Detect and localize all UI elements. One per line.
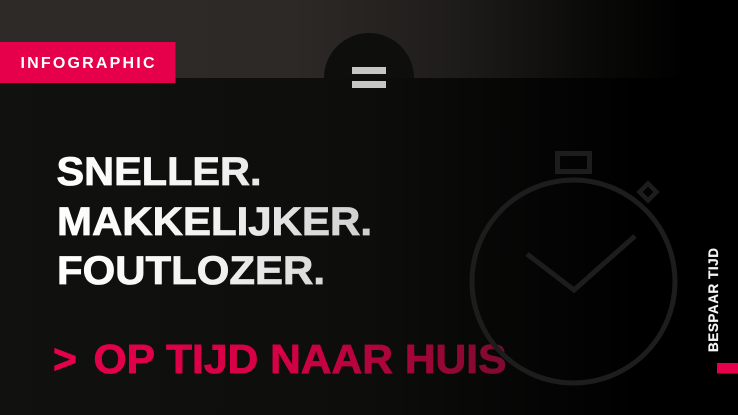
label: infographic tag	[0, 42, 176, 83]
tagline: OP TIJD NAAR HUIS	[94, 336, 507, 382]
icon: stopwatch	[472, 154, 675, 383]
label: infographic tag: INFOGRAPHIC	[20, 55, 155, 72]
red side marker	[717, 363, 738, 374]
heading	[56, 150, 372, 293]
top band	[0, 0, 738, 78]
side label: BESPAAR TIJD	[706, 248, 721, 352]
icon: menu equals bars	[352, 67, 386, 88]
heading: SNELLER.	[56, 150, 262, 194]
heading: FOUTLOZER.	[57, 249, 325, 293]
tagline: >	[53, 336, 77, 382]
menu dome tab	[324, 33, 414, 78]
heading: MAKKELIJKER.	[57, 200, 372, 244]
